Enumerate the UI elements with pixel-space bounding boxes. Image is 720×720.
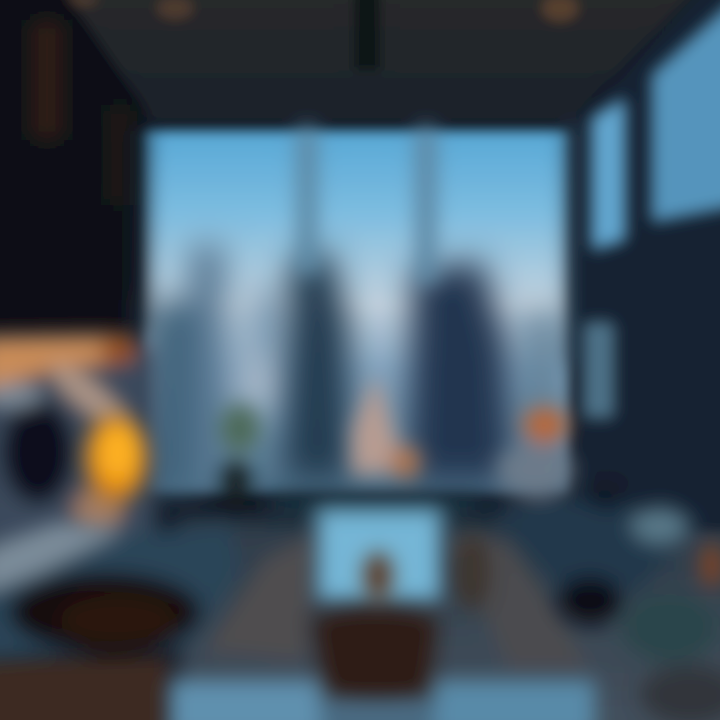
central towers bbox=[284, 250, 510, 480]
plant bbox=[220, 404, 260, 504]
left sofa bbox=[0, 522, 240, 660]
right windows bbox=[584, 0, 720, 418]
floor bbox=[0, 520, 720, 720]
right sofa bbox=[490, 407, 720, 720]
skyline silhouettes bbox=[150, 245, 558, 490]
central window with sky bbox=[145, 132, 567, 492]
fireplace bbox=[0, 335, 155, 555]
distant road and lights bbox=[352, 375, 420, 478]
ceiling bbox=[55, 0, 705, 120]
front chair bbox=[312, 534, 490, 705]
foreground floor glow bbox=[170, 680, 595, 720]
window mullions bbox=[132, 125, 588, 365]
center table bbox=[270, 495, 480, 600]
left dark wall bbox=[0, 0, 145, 330]
fireplace flame bbox=[86, 416, 146, 500]
right wall bbox=[578, 0, 720, 530]
